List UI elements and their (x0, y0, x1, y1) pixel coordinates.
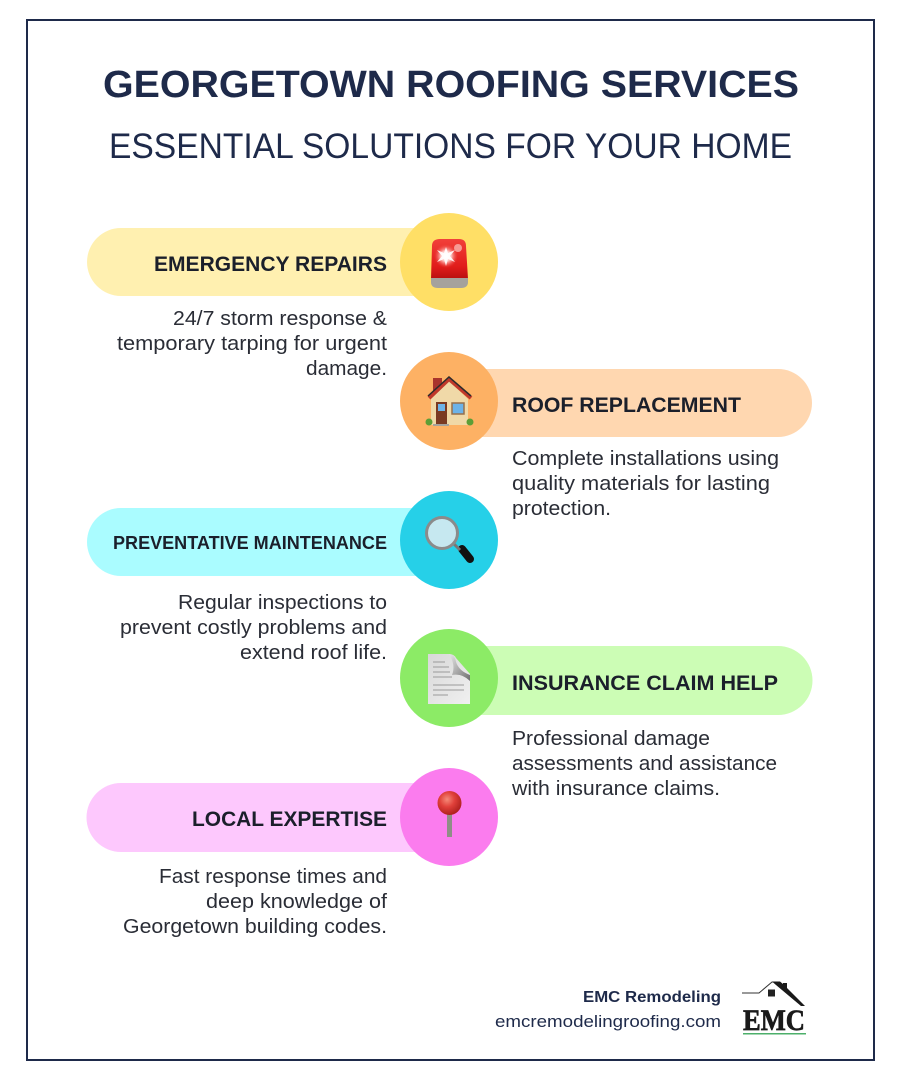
heading: insurance claim help: INSURANCE CLAIM HELP (512, 672, 778, 695)
description: insurance claim help: assessments and assistance (512, 753, 777, 775)
icon circle: emergency repairs (400, 213, 498, 311)
description: roof replacement: protection. (512, 498, 611, 520)
logo: EMC: EMC (743, 1004, 805, 1037)
heading pill: local expertise (87, 783, 449, 852)
description: emergency repairs: 24/7 storm response & (173, 308, 388, 330)
heading: emergency repairs: EMERGENCY REPAIRS (154, 253, 387, 276)
panel: roof replacement (400, 352, 812, 520)
description: emergency repairs: damage. (306, 358, 387, 380)
icon circle: preventative maintenance (400, 491, 498, 589)
icon: document (428, 654, 470, 704)
footer: website: emcremodelingroofing.com (495, 1012, 721, 1031)
panel: insurance claim help (400, 629, 813, 800)
panel: preventative maintenance (87, 491, 498, 664)
subtitle: ESSENTIAL SOLUTIONS FOR YOUR HOME (109, 127, 792, 166)
icon circle: roof replacement (400, 352, 498, 450)
heading pill: insurance claim help (449, 646, 813, 715)
heading pill: preventative maintenance (87, 508, 449, 576)
heading: roof replacement: ROOF REPLACEMENT (512, 394, 741, 417)
description: insurance claim help: with insurance claims. (511, 778, 720, 800)
logo: EMC (742, 982, 806, 1037)
description: roof replacement (512, 448, 779, 520)
footer: company name: EMC Remodeling (583, 989, 721, 1006)
title: GEORGETOWN ROOFING SERVICES (103, 64, 799, 106)
panel: emergency repairs (87, 213, 498, 380)
heading: local expertise: LOCAL EXPERTISE (192, 808, 387, 831)
description: insurance claim help: Professional damage (512, 728, 710, 750)
description: emergency repairs (117, 308, 388, 380)
description: roof replacement: quality materials for lasting (512, 473, 770, 495)
icon: magnifying glass (426, 518, 470, 559)
heading pill: emergency repairs (87, 228, 449, 296)
description: emergency repairs: temporary tarping for urgent (117, 333, 387, 355)
panel: local expertise (87, 768, 498, 938)
heading pill: roof replacement (449, 369, 812, 437)
icon: pushpin (438, 791, 462, 837)
icon circle: insurance claim help (400, 629, 498, 727)
description: local expertise: Georgetown building codes. (123, 916, 387, 938)
icon circle: local expertise (400, 768, 498, 866)
description: preventative maintenance: Regular inspections to (178, 592, 387, 614)
description: preventative maintenance: prevent costly problems and (120, 617, 387, 639)
description: preventative maintenance (120, 592, 387, 664)
description: insurance claim help (511, 728, 777, 800)
description: roof replacement: Complete installations using (512, 448, 779, 470)
description: preventative maintenance: extend roof life. (240, 642, 387, 664)
description: local expertise: deep knowledge of (206, 891, 387, 913)
icon: siren (431, 239, 468, 288)
description: local expertise (123, 866, 387, 938)
heading: preventative maintenance: PREVENTATIVE MAINTENANCE (113, 533, 387, 553)
icon: house (426, 377, 474, 426)
description: local expertise: Fast response times and (159, 866, 387, 888)
